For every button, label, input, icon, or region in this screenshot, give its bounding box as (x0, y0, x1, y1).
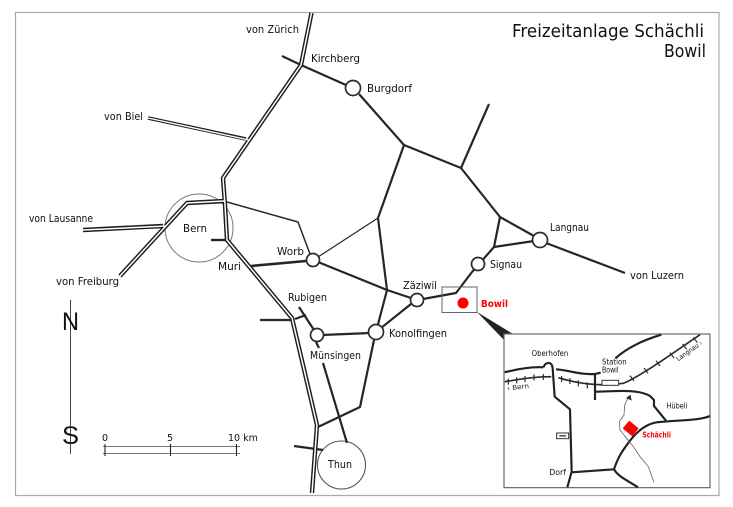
place labels: Signau (490, 258, 522, 271)
compass: S (62, 422, 79, 450)
inset roads (505, 335, 710, 487)
place labels: von Zürich (246, 23, 299, 36)
title: Bowil (664, 41, 706, 62)
title (512, 21, 706, 62)
inset Dorf sign (557, 433, 569, 439)
inset labels: Hübeli (667, 402, 687, 411)
place labels: Konolfingen (389, 327, 447, 340)
scale bar: 0 (102, 433, 108, 444)
place labels: Worb (277, 245, 304, 258)
compass: N (62, 308, 79, 336)
town markers (306, 80, 548, 342)
compass (62, 300, 79, 454)
inset map (504, 334, 710, 488)
place labels: von Lausanne (29, 212, 93, 225)
motorways (83, 13, 317, 493)
place labels: Muri (218, 260, 241, 273)
scale bar (102, 433, 258, 456)
region circles (165, 194, 366, 489)
title: Freizeitanlage Schächli (512, 21, 704, 42)
inset labels: Oberhofen (532, 349, 568, 358)
inset labels: Langnau › (675, 339, 704, 363)
place labels: Münsingen (310, 349, 361, 362)
inset stream (619, 397, 654, 482)
inset labels: ‹ Bern (507, 382, 529, 393)
inset labels (507, 339, 704, 477)
place labels: Bern (183, 222, 207, 235)
Bowil locator (442, 287, 508, 312)
callout pointer (477, 312, 513, 340)
place labels: von Biel (104, 110, 143, 123)
place labels: Thun (327, 458, 352, 471)
place labels (29, 23, 684, 471)
inset station (602, 380, 619, 385)
scale bar: 10 km (228, 433, 258, 444)
place labels: Rubigen (288, 291, 327, 304)
place labels: von Luzern (630, 269, 684, 282)
inset railway (505, 335, 700, 388)
place labels: Zäziwil (403, 279, 437, 292)
place labels: Langnau (550, 221, 589, 234)
inset labels: Bowil (602, 365, 619, 374)
place labels: von Freiburg (56, 275, 119, 288)
scale bar: 5 (167, 433, 173, 444)
place labels: Burgdorf (367, 82, 413, 95)
main roads (211, 56, 625, 450)
inset Schächli marker (623, 421, 639, 436)
Bowil locator: Bowil (481, 299, 508, 310)
inset labels: Dorf (549, 468, 566, 477)
place labels: Kirchberg (311, 52, 360, 65)
inset labels: Station (602, 358, 627, 367)
inset arrow (626, 395, 632, 401)
inset labels: Schächli (642, 431, 671, 440)
